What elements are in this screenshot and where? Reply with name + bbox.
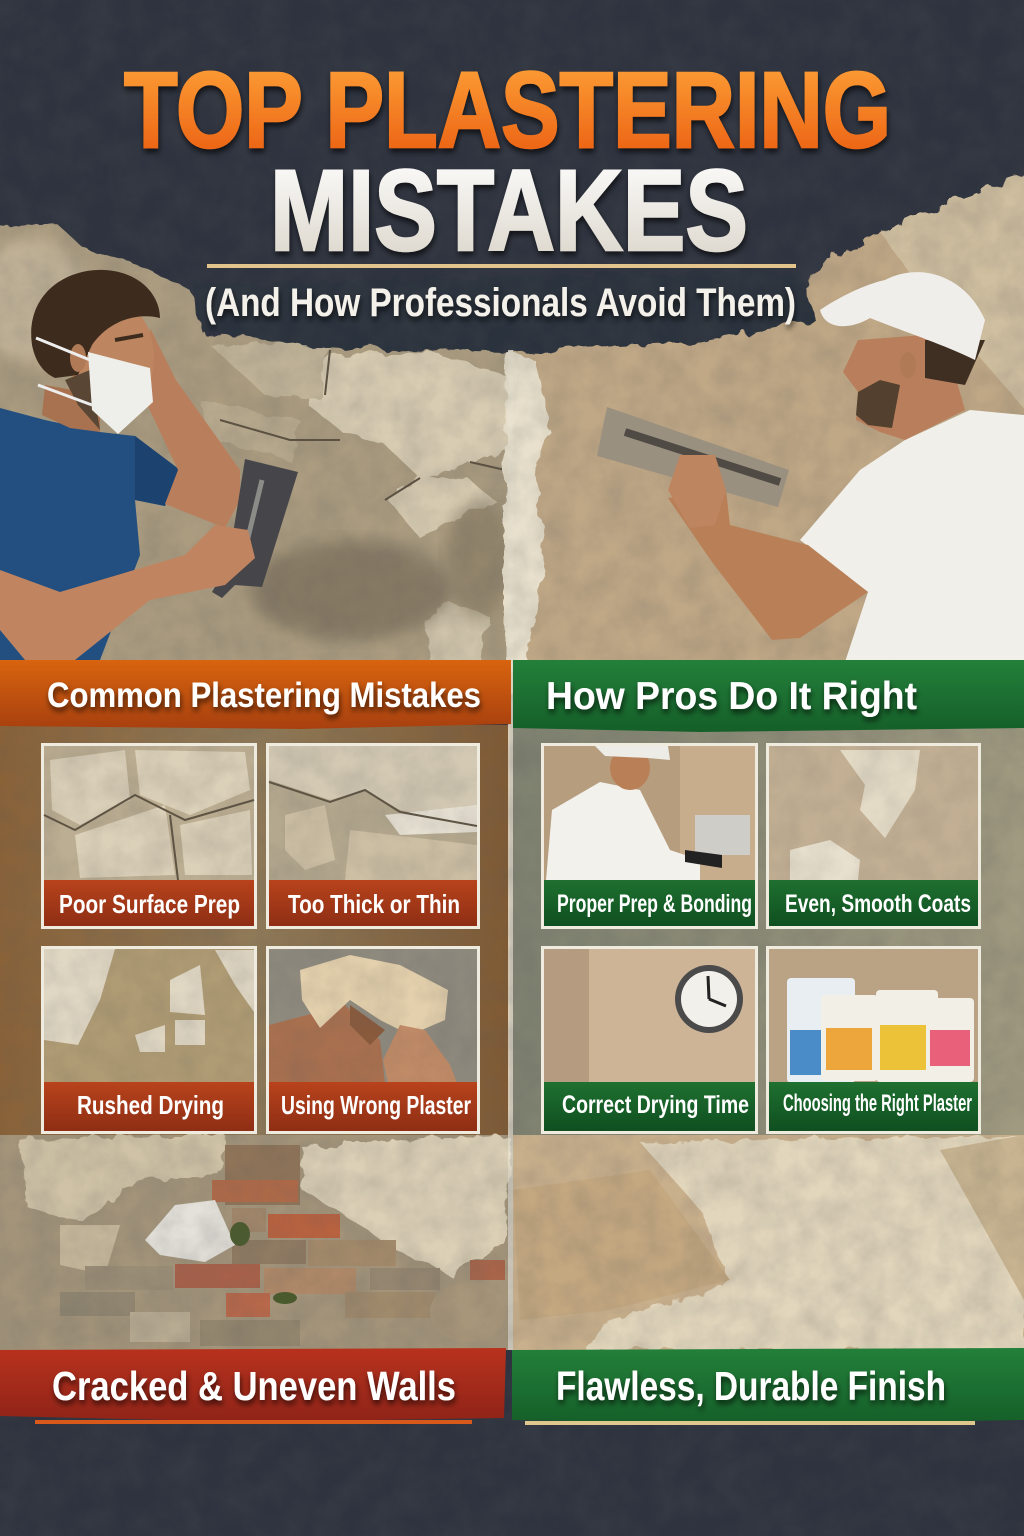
mistake card: rushed drying: Rushed Drying <box>77 1090 224 1120</box>
title rule <box>207 264 796 268</box>
pro card: even smooth coats: Even, Smooth Coats <box>785 890 971 918</box>
mistake card: using wrong plaster: Using Wrong Plaster <box>281 1090 471 1120</box>
mistake card: poor surface prep <box>41 743 257 929</box>
header: common plastering mistakes <box>0 660 511 729</box>
mistake card: rushed drying <box>41 946 257 1134</box>
pro card: choosing the right plaster <box>766 946 981 1134</box>
header: how pros do it right: How Pros Do It Right <box>546 675 917 718</box>
banner: cracked and uneven walls <box>0 1348 506 1424</box>
title: mistakes: MISTAKES <box>270 147 748 275</box>
clock icon <box>675 965 743 1033</box>
face mask <box>88 352 153 434</box>
centre divider <box>508 350 513 1350</box>
pro card: proper prep and bonding: Proper Prep & Bonding <box>557 890 752 918</box>
right repaired wall <box>505 172 1024 695</box>
dark brush band behind subtitle <box>195 270 815 352</box>
left lower panel background <box>0 725 510 1150</box>
banner: flawless durable finish <box>512 1348 1024 1425</box>
right lower panel background <box>513 725 1024 1150</box>
plaster bags <box>787 978 974 1083</box>
left damaged wall <box>0 222 525 695</box>
banner: cracked and uneven walls: Cracked & Uneven Walls <box>52 1363 456 1409</box>
plastering trowel <box>597 407 789 507</box>
header: common plastering mistakes: Common Plastering Mistakes <box>47 676 481 715</box>
mistake card: too thick or thin: Too Thick or Thin <box>288 889 460 919</box>
header: how pros do it right <box>513 660 1024 732</box>
right smooth plaster wall <box>513 1135 1024 1350</box>
pro card: proper prep and bonding <box>541 743 758 929</box>
banner: flawless durable finish: Flawless, Durable Finish <box>556 1363 946 1409</box>
left crumbling brick wall <box>0 1135 508 1350</box>
left wall stains <box>0 240 515 640</box>
white cap <box>820 272 985 360</box>
pro card: correct drying time <box>541 946 758 1134</box>
pro card: even smooth coats <box>766 743 981 929</box>
subtitle: (And How Professionals Avoid Them) <box>205 281 796 325</box>
mistake card: using wrong plaster <box>266 946 480 1134</box>
right man plastering <box>597 272 1024 662</box>
pro card: correct drying time: Correct Drying Time <box>562 1091 749 1119</box>
left man wearing mask <box>0 270 298 662</box>
trowel <box>212 459 298 598</box>
mistake card: poor surface prep: Poor Surface Prep <box>59 889 240 919</box>
mistake card: too thick or thin <box>266 743 480 929</box>
